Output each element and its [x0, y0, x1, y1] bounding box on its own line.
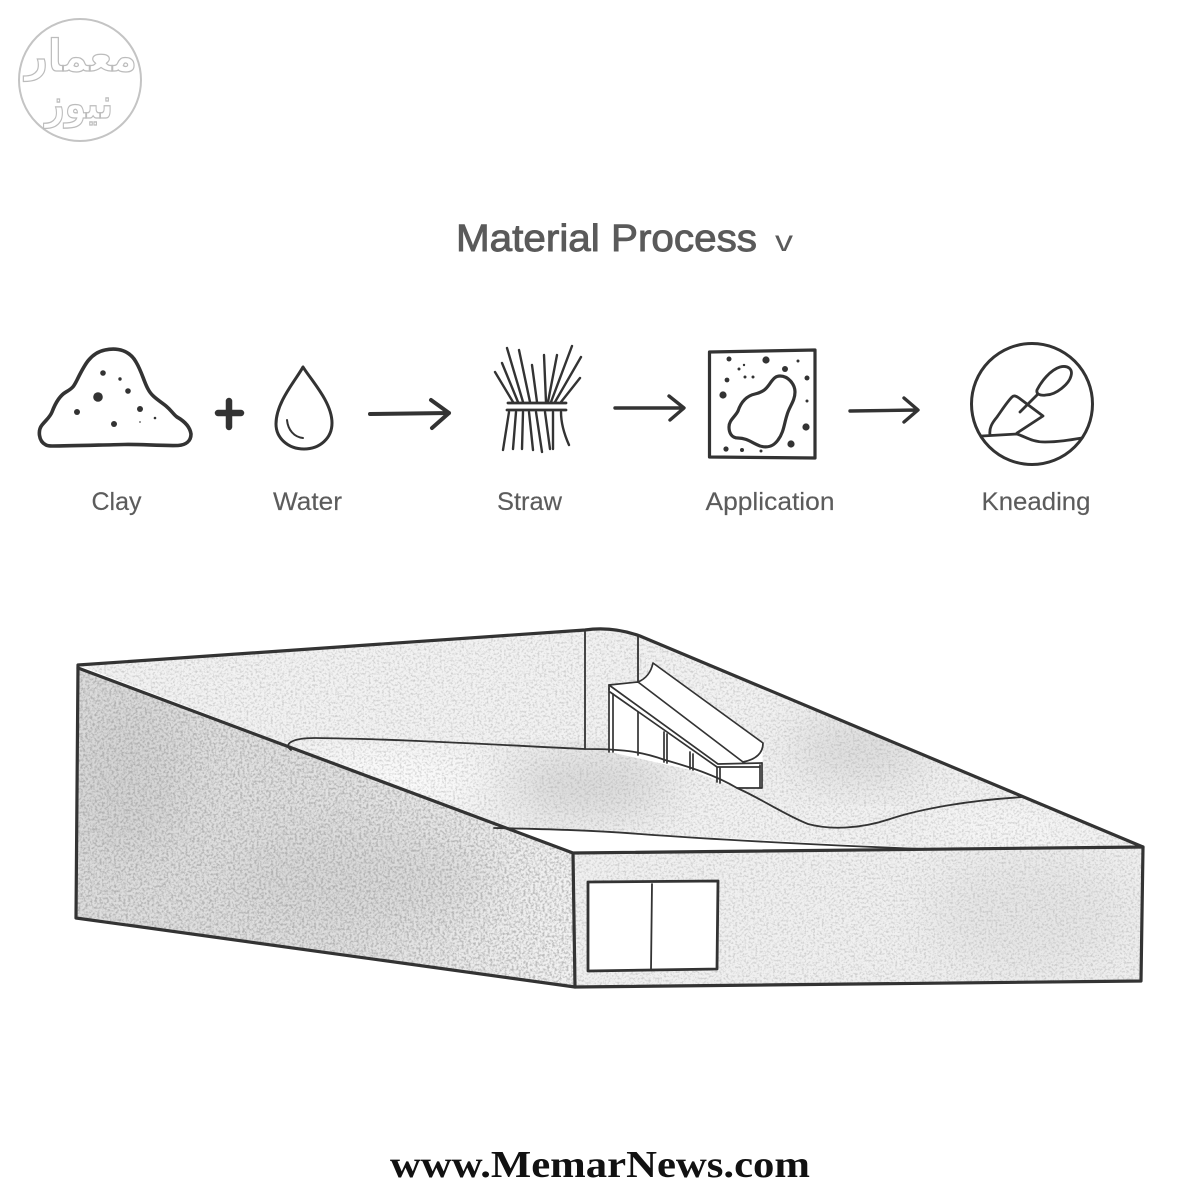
arrow: application to kneading [850, 398, 918, 422]
logo: Memar News round stamp: نیوز [43, 79, 113, 129]
logo: Memar News round stamp: معمار [23, 31, 137, 82]
icon: clay mound [39, 349, 191, 446]
labels under icons [92, 488, 1090, 516]
icon: straw bundle [495, 346, 581, 452]
labels under icons: Straw [497, 488, 563, 516]
logo: Memar News round stamp [19, 19, 141, 141]
rooftop skylight [609, 663, 763, 788]
labels under icons: Application [706, 488, 834, 516]
icon: trowel in circle [972, 344, 1092, 464]
heavy building outline [76, 629, 1143, 987]
labels under icons: Clay [92, 488, 142, 516]
white ledge strip [516, 830, 920, 852]
left exterior wall [70, 660, 580, 995]
building illustration [70, 620, 1150, 995]
roof and courtyard surfaces [82, 630, 1134, 848]
icon: plus sign [218, 401, 241, 427]
icon: application panel [710, 350, 815, 458]
labels under icons: Water [273, 488, 342, 516]
title: Material Process v: Material Process [456, 218, 757, 260]
front exterior wall [570, 845, 1150, 990]
arrow: straw to application [615, 396, 684, 420]
icon: water drop [276, 367, 332, 449]
footer website address: www.MemarNews.com [390, 1144, 810, 1186]
labels under icons: Kneading [982, 488, 1090, 516]
title: Material Process v: v [775, 225, 793, 258]
arrow: water to straw [370, 400, 449, 428]
window on front wall [588, 881, 718, 971]
wall creases and courtyard contour lines [288, 632, 1024, 849]
